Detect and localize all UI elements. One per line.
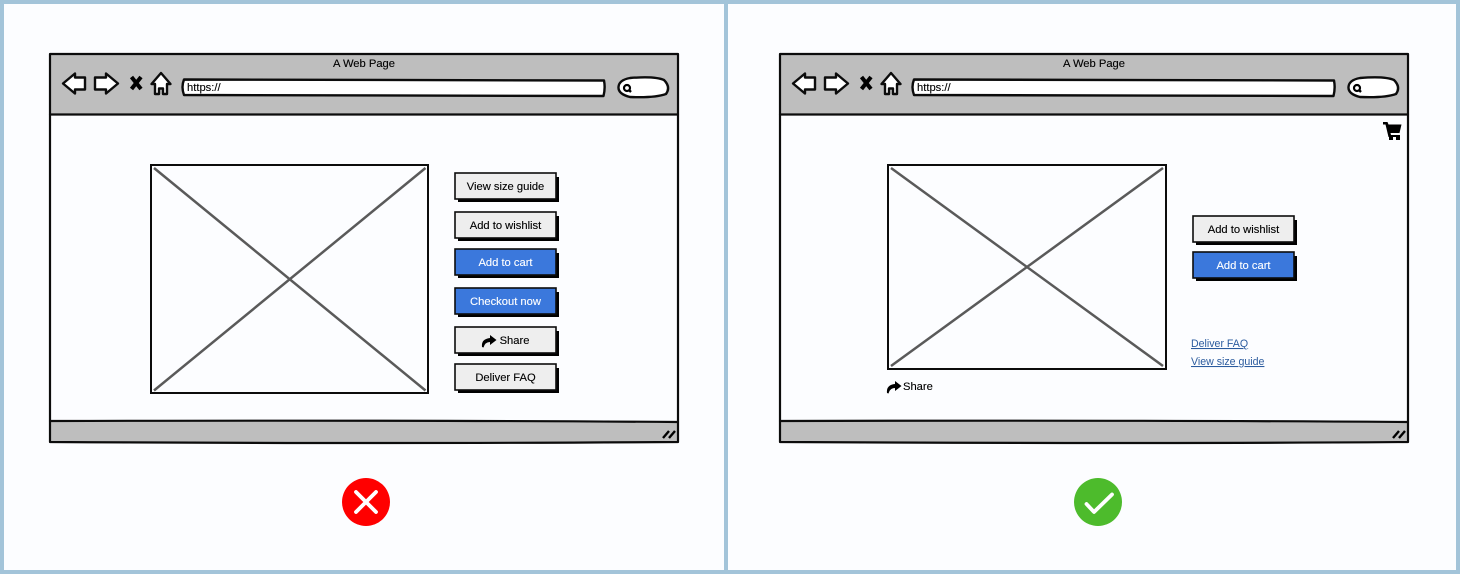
button: deliver faq [455,364,559,393]
button: checkout now: Checkout now [470,296,542,308]
link: view size guide: View size guide [1191,356,1265,368]
window title: A Web Page [1063,58,1125,70]
button: checkout now [455,288,559,317]
image placeholder [888,165,1166,369]
icon: forward arrow [95,74,118,94]
icon: back arrow [63,74,85,94]
icon: resize grip [1393,431,1405,438]
url bar: https:// [917,82,951,94]
icon: stop [862,77,871,89]
icon: resize grip [663,431,675,438]
button: add to cart [455,249,559,278]
icon: home [152,73,170,94]
url bar: https:// [187,82,221,94]
search box [618,77,668,97]
link: deliver faq: Deliver FAQ [1191,338,1248,350]
button: share [455,327,559,356]
icon: back arrow [793,74,815,94]
button: add to wishlist: Add to wishlist [470,220,542,232]
url bar [912,80,1335,96]
browser window: toolbar and status bars [780,54,1408,443]
share action [887,381,933,394]
button: view size guide [455,173,559,202]
search box [1348,77,1398,97]
button: add to cart: Add to cart [478,257,533,269]
button: add to cart: Add to cart [1216,260,1271,272]
icon: green check badge [1074,478,1122,526]
button: add to cart [1193,252,1297,281]
button: share: Share [500,335,529,347]
button: deliver faq: Deliver FAQ [475,372,536,384]
icon: stop [132,77,141,89]
window title: A Web Page [333,58,395,70]
icon: home [882,73,900,94]
button: add to wishlist [1193,216,1297,245]
icon: shopping cart [1383,122,1402,140]
panel: bad example browser wireframe [50,54,678,443]
button: add to wishlist: Add to wishlist [1208,224,1280,236]
browser window: toolbar and status bars [50,54,678,443]
image placeholder [151,165,428,393]
panel: bad example frame [2,2,726,572]
url bar [182,80,605,96]
icon: forward arrow [825,74,848,94]
button: add to wishlist [455,212,559,241]
icon: red cross badge [342,478,390,526]
panel: good example browser wireframe [780,54,1408,443]
share action: Share [903,381,933,393]
button: view size guide: View size guide [467,181,544,193]
panel: good example frame [726,2,1458,572]
